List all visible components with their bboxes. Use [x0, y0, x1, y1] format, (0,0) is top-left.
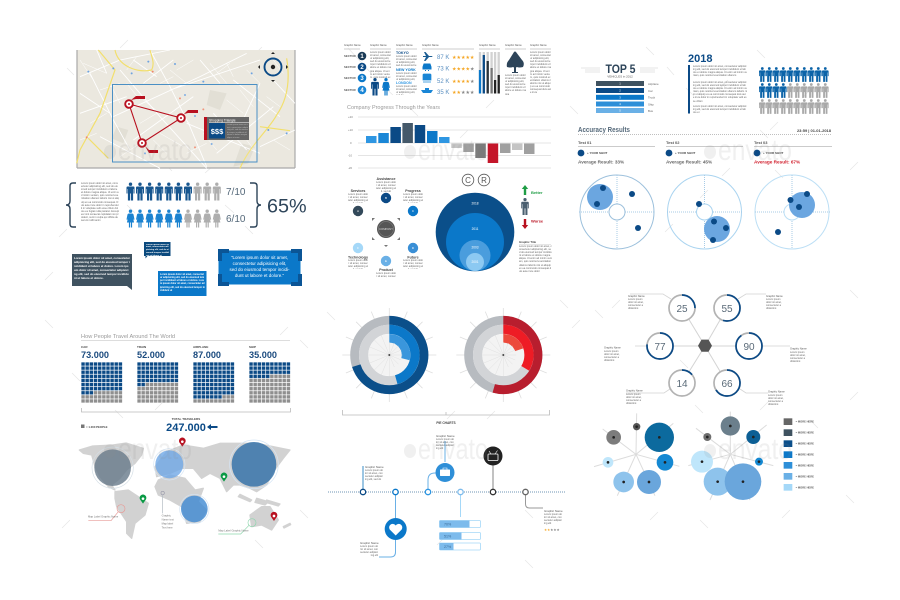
sector numbers: SECTOR [344, 54, 356, 58]
test labels: Average Result: 33% [578, 160, 625, 164]
panel: ring gauges around hexagon [604, 294, 807, 404]
bubble legend [784, 418, 814, 491]
icon: train [423, 74, 431, 82]
blue quote box: "Lorem ipsum dolor sit amet, [231, 254, 288, 260]
mini bar chart [480, 52, 499, 94]
gauge 25 [669, 295, 695, 321]
icon: tree [507, 52, 524, 73]
panel: columns of sector statistics: Graphic Name [370, 43, 387, 47]
sector numbers: 3 [360, 76, 364, 82]
dark speech bubble [72, 254, 132, 290]
panel: world map [79, 438, 291, 538]
panel: columns of sector statistics: Graphic Name [505, 43, 522, 47]
airplane waffle [193, 345, 234, 403]
timeline note 2: Lorem ipsum dolor sit amet, consectetur adipisicing elit [360, 545, 378, 557]
icon: compass target [258, 52, 288, 82]
blue text box: Lorem ipsum dolor sit amet, consectetur adipisicing elit, sed do eiusmod tempor incididunt ut labore et dolore. Lorem ipsum dolor sit amet, consectetur adipisicing elit, sed do eiusmod tempor incididunt ut [160, 272, 205, 292]
ship waffle: SHIP [249, 345, 256, 349]
legend: = 1.000 PEOPLE [86, 425, 108, 429]
pie charts bracket label [342, 410, 550, 425]
timeline note 4 with rating: ★★★★★ [544, 528, 560, 532]
map pins [140, 438, 277, 521]
panel: 2018 text: 2018 [688, 53, 712, 65]
gauge 55 [714, 295, 740, 321]
train waffle: 52.000 [137, 350, 165, 361]
heading: TOP 5 [606, 62, 636, 76]
hub labels: Assistance [377, 177, 395, 181]
transport ratings: ★★★★★ [452, 79, 475, 85]
positive bars [366, 123, 450, 143]
hub labels: Technology [348, 256, 368, 260]
bubble legend: = MORE HERE [796, 474, 814, 478]
left bubble chart [594, 413, 679, 496]
bar labels: Car [648, 89, 653, 93]
transport ratings: ★★★★★ [452, 90, 475, 96]
icon: copyright and registered marks [462, 174, 490, 186]
ranked bars: 1 [619, 82, 621, 86]
red shopping triangle [125, 96, 198, 153]
better / worse indicator: Worse [531, 218, 544, 224]
ranked bars: 4 [619, 102, 621, 106]
sector numbers: 2 [360, 65, 364, 71]
car waffle: 73.000 [81, 350, 109, 361]
bubble legend: = MORE HERE [796, 420, 814, 424]
blue quote box: sed do eiusmod tempor incidi- [229, 267, 290, 272]
airplane waffle: 87.000 [193, 350, 221, 361]
text column: Lorem ipsum dolor sit amet, consectetur adipisicing elit, sed do eiusmod tempor incididunt ut labore et dolore magna [505, 74, 526, 95]
hub nodes: A [357, 209, 359, 213]
people pictogram grid [759, 67, 829, 114]
left brace [66, 183, 76, 227]
gauge 77 [647, 333, 673, 359]
text and gender icons column [370, 51, 391, 96]
timeline connectors [362, 466, 364, 489]
transport ratings: ★★★★★ [452, 66, 475, 72]
gauge notes: Graphic Name [628, 294, 645, 298]
timeline nodes [360, 489, 528, 495]
icon: car [423, 64, 431, 70]
test labels: + YOUR SHOT [763, 151, 784, 155]
timeline note 4 with rating [544, 509, 563, 532]
envato watermarks: envato [118, 433, 192, 466]
bubble legend: = MORE HERE [796, 485, 814, 489]
red radial pie chart [456, 308, 550, 402]
panel: columns of sector statistics: Graphic Name [344, 43, 361, 47]
better / worse indicator: Better [531, 190, 543, 195]
panel: company progress bar chart: -20 [348, 166, 352, 170]
label 6/10: 6/10 [226, 214, 246, 225]
better / worse indicator [521, 185, 544, 229]
panel: company progress bar chart: +10 [348, 128, 353, 132]
map callouts: Map Label Graphic Name [218, 528, 249, 532]
transport ratings: ★★★★★ [452, 55, 475, 61]
target chart 3 [755, 175, 830, 249]
panel: company progress bar chart [347, 105, 551, 170]
65% value: 65% [267, 196, 307, 218]
progress bars: 27% [444, 545, 452, 549]
icon: copyright and registered marks: C [465, 176, 471, 185]
map callouts: Map label [162, 522, 174, 526]
envato watermarks: envato [418, 433, 488, 466]
test labels: Average Result: 45% [666, 160, 713, 164]
panel: speech bubbles [72, 242, 302, 296]
cities column: NEW YORK [396, 68, 416, 72]
panel: 2018 text: Lorem ipsum dolor sit amet, consectetur adipisicing elit, sed do eiusmod tempor incididunt ut labore et dolore magna aliqua. Ut enim ad minim veniam, quis nostrud exercitation ullamco [693, 65, 747, 77]
panel: 2018 text: Lorem ipsum dolor sit amet, consectetur adipisicing elit, sed do eiusmod tempor incididunt ut labore et [693, 105, 746, 114]
progress bars: 51% [444, 534, 452, 538]
panel: bubble charts [594, 412, 814, 500]
pie charts bracket label: PIE CHARTS [436, 421, 456, 425]
heading: Accuracy Results [578, 127, 630, 134]
panel: map with shopping triangle [77, 50, 295, 168]
bar labels: Ship [648, 102, 654, 106]
blue quote box: consectetur adipisicing elit, [233, 261, 286, 266]
blue quote box [218, 249, 302, 286]
test labels: + YOUR SHOT [587, 151, 608, 155]
icon: heart [385, 518, 407, 540]
bubble legend: = MORE HERE [796, 453, 814, 457]
icon: briefcase [436, 463, 454, 482]
gauge notes: Graphic Name [604, 346, 621, 350]
panel: top 5 vehicles: VEHICLES in 2012 [607, 74, 633, 78]
car waffle: CAR [81, 345, 88, 349]
timeline note 2 [360, 541, 379, 558]
nested circle chart [436, 193, 514, 271]
transport ratings: 52 K [437, 79, 449, 85]
icon: ship [421, 88, 433, 93]
envato watermarks: envato [418, 134, 488, 167]
hub labels: Services [351, 189, 365, 193]
cities column [396, 51, 417, 94]
envato watermarks [104, 134, 792, 466]
timeline note 4 with rating: Lorem ipsum dolor sit amet, consectetur adipisicing elit [544, 513, 562, 525]
train waffle [137, 345, 178, 403]
total travelers: TOTAL TRAVELERS [172, 417, 200, 421]
panel: top 5 vehicles [581, 62, 659, 113]
map callouts: Text here [162, 526, 173, 530]
right brace [250, 183, 261, 227]
hub labels: Progress [405, 189, 421, 193]
hub labels [348, 177, 421, 272]
panel: company progress bar chart: -10 [348, 154, 352, 158]
hub nodes [353, 193, 418, 266]
sector numbers: SECTOR [344, 76, 356, 80]
blue radial pie chart [342, 308, 436, 402]
panel: how people travel waffle charts [81, 334, 290, 434]
text column: Lorem ipsum dolor sit amet, consectetur adipisicing elit, sed do eiusmod tempor incididunt ut labore et dolore magna aliqua. Ut enim ad minim veniam, quis nostrud exercitation ullamco laboris nisi ut aliquip ex ea commodo consequat duis aute irure [530, 51, 551, 94]
total travelers: 247.000 [166, 422, 206, 434]
arrow: worse [522, 219, 528, 229]
panel: 2018 text: Lorem ipsum dolor sit amet, consectetur adipisicing elit, sed do eiusmod tempor incididunt ut labore et dolore magna aliqua. Ut enim ad minim veniam, quis nostrud exercitation ullamco laboris nisi ut aliquip ex ea commodo consequat duis aute irure dolor in reprehenderit in voluptate velit esse cillum [693, 81, 747, 103]
transport ratings: 87 K [437, 55, 449, 61]
panel: columns of sector statistics [344, 43, 551, 96]
heading: How People Travel Around The World [81, 334, 175, 340]
panel: company hub diagram [348, 177, 423, 278]
cities column: TOKYO [396, 51, 409, 55]
hub nodes: C [412, 209, 415, 213]
transport ratings [421, 52, 475, 96]
panel: columns of sector statistics: Graphic Name [479, 43, 496, 47]
icon: person [521, 198, 529, 215]
chart heading: Company Progress Through the Years [347, 105, 440, 111]
gauge notes: Graphic Name [626, 388, 643, 392]
map callouts [88, 491, 256, 534]
test labels [578, 140, 801, 164]
nested circle chart: 2003 [471, 246, 479, 250]
shopping triangle callout: Shopping Triangle [209, 118, 236, 122]
sector numbers: SECTOR [344, 65, 356, 69]
gauge 55: 55 [721, 304, 733, 315]
envato watermarks: envato [718, 134, 792, 167]
continents [79, 443, 291, 538]
nested circle chart: 2011 [472, 227, 479, 231]
gauge notes: Graphic Name [766, 294, 783, 298]
progress bars: 70% [444, 522, 452, 526]
panel: 2018 text [688, 53, 747, 114]
text block: Lorem ipsum dolor sit amet, consectetur adipisicing elit, sed do eiusmod tempor incididunt ut labore et dolore magna aliqua. Ut enim ad minim veniam, quis nostrud exercitation ullamco laboris nisi ut aliquip ex ea commodo consequat. Duis aute irure dolor in reprehenderit in voluptate velit esse cillum dolore eu fugiat nulla pariatur. Excepteur sint occaecat cupidatat non proident, sunt in culpa qui officia deserunt mollit anim [81, 182, 119, 222]
sector numbers: 1 [360, 54, 364, 60]
panel: timeline [328, 434, 565, 558]
bar labels [648, 82, 659, 113]
gauge notes: Graphic Name [790, 346, 807, 350]
timeline note 1 [365, 465, 384, 482]
test labels: Test 01 [578, 140, 592, 145]
envato watermarks: envato [118, 134, 192, 167]
icon: television [484, 446, 502, 466]
test labels: Test 02 [666, 140, 680, 145]
panel: columns of sector statistics: Graphic Name [422, 43, 439, 47]
ranked bars [596, 81, 644, 113]
shopping triangle callout [204, 117, 249, 140]
map selection frame [112, 84, 257, 162]
gauge 66 [714, 370, 740, 396]
shopping triangle callout: $$$ [211, 127, 224, 136]
icon: hexagon hub [698, 340, 712, 352]
bar labels: Airplane [648, 82, 659, 86]
bubble legend: = MORE HERE [796, 463, 814, 467]
blue quote box: dunt ut labore et dolore." [235, 273, 284, 278]
test labels: + YOUR SHOT [675, 151, 696, 155]
airplane waffle: AIRPLANE [193, 345, 208, 349]
gauge 66: 66 [721, 379, 733, 390]
timeline note 1: Lorem ipsum dolor sit amet, consectetur adipisicing elit, sed do [365, 469, 383, 481]
sector numbers: 4 [360, 88, 364, 94]
hub nodes: E [385, 259, 387, 263]
hub labels: Future [407, 256, 419, 260]
hub circle: COMPANY [379, 227, 393, 231]
sector numbers: SECTOR [344, 88, 356, 92]
timeline note 3: Lorem ipsum dolor sit amet, consectetur adipisicing elit [436, 438, 454, 450]
nested circle chart: 2001 [471, 260, 479, 264]
panel: accuracy results: 23:59 | 01-01-2018 [797, 128, 832, 133]
bubble legend: = MORE HERE [796, 442, 814, 446]
icon: plane [423, 52, 432, 61]
timeline note 3: Graphic Name [436, 434, 455, 438]
small navy speech bubble [144, 242, 170, 258]
men pictogram row [126, 182, 221, 200]
test labels: Test 03 [754, 140, 768, 145]
shopping triangle callout: Lorem ipsum dolor sit amet, consectetur adipisicing elit, sed do eiusmod tempor incididunt ut labore et dolore magna aliqua ut enim [227, 124, 248, 138]
women pictogram row [126, 210, 221, 228]
timeline note 2: Graphic Name [360, 541, 379, 545]
ranked bars: 5 [619, 108, 621, 112]
timeline note 1: Graphic Name [365, 465, 384, 469]
label 7/10: 7/10 [226, 187, 246, 198]
total travelers [166, 417, 218, 434]
side note text: Graphic Title [519, 240, 536, 244]
dark speech bubble: Lorem ipsum dolor sit amet, consectetur adipisicing elit, sed do eiusmod tempor incididunt ut labore et dolore. Lorem ipsum dolor sit amet, consectetur adipisicing elit, sed do eiusmod tempor incididunt ut labore et dolore. [74, 256, 130, 280]
panel: accuracy results [578, 127, 832, 249]
target chart 2 [667, 175, 743, 249]
panel: columns of sector statistics: Graphic Name [396, 43, 413, 47]
train waffle: TRAIN [137, 345, 146, 349]
hub nodes: F [357, 246, 359, 250]
right bubble chart [688, 412, 773, 500]
panel: pie charts [342, 308, 550, 425]
panel: columns of sector statistics: Graphic Name [530, 43, 547, 47]
region bubbles [92, 440, 278, 524]
map callouts: Graphic [162, 514, 172, 518]
map callouts: Map Label Graphic Name [88, 514, 119, 518]
sector numbers [344, 52, 366, 94]
transport ratings: 73 K [437, 66, 449, 72]
cities column: LONDON [396, 81, 412, 85]
gauge 90 [736, 333, 762, 359]
gauge notes [604, 294, 807, 404]
bubble legend: = MORE HERE [796, 431, 814, 435]
ship waffle [249, 345, 290, 403]
negative bars [451, 144, 534, 163]
test labels: Average Result: 67% [754, 160, 801, 164]
arrow: pointing left [207, 424, 218, 430]
transport ratings: 35 K [437, 90, 449, 96]
hub nodes: D [412, 246, 415, 250]
ranked bars: 3 [619, 95, 621, 99]
car waffle [81, 345, 122, 403]
side note text: Lorem ipsum dolor sit amet, consectetur adipisicing elit, sed do eiusmod tempor incididunt ut labore et dolore magna aliqua. Ut enim ad minim veniam, quis nostrud exercitation ullamco laboris nisi ut aliquip ex ea commodo consequat duis aute irure dolor [519, 245, 552, 272]
ranked bars: 2 [619, 88, 621, 92]
bar labels: Bus [648, 109, 654, 113]
gauge 77: 77 [654, 342, 666, 353]
gauge 14 [669, 370, 695, 396]
icon: copyright and registered marks: R [481, 176, 487, 185]
envato watermarks: envato [718, 433, 792, 466]
progress bars [440, 520, 480, 550]
hub nodes: B [385, 196, 387, 200]
nested circle chart: 2018 [471, 202, 479, 206]
target chart 1 [579, 175, 655, 249]
bar labels: Truck [648, 96, 656, 100]
gauge 14: 14 [676, 379, 688, 390]
panel: people ratio 65% [66, 182, 307, 228]
arrow: better [522, 185, 528, 195]
timeline note 4 with rating: Graphic Name [544, 509, 563, 513]
gauge 25: 25 [676, 304, 688, 315]
map callouts: Name text [162, 518, 174, 522]
panel: company progress bar chart: +20 [348, 115, 353, 119]
ship waffle: 35.000 [249, 350, 277, 361]
gauge 90: 90 [743, 342, 755, 353]
gauge notes: Graphic Name [768, 390, 785, 394]
panel: company progress bar chart: 0 [350, 141, 352, 145]
hub labels: Product [379, 268, 394, 272]
